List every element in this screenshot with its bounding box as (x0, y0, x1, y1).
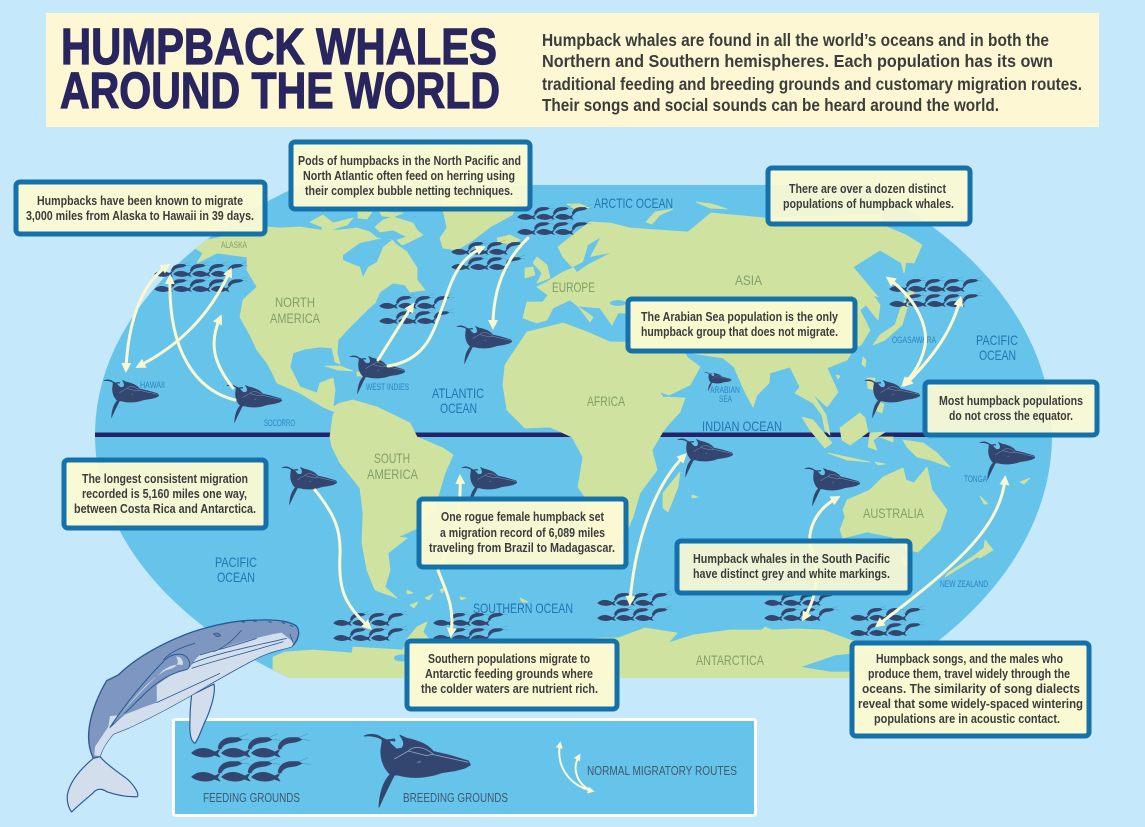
callout: songs: reveal that some widely-spaced wintering (858, 697, 1083, 711)
world map (95, 185, 1052, 678)
ocean labels: ARCTIC OCEAN (594, 195, 673, 211)
legend: breeding grounds (364, 734, 508, 807)
intro text: Their songs and social sounds can be heard around the world. (542, 95, 999, 115)
callout: songs: oceans. The similarity of song dialects (862, 682, 1080, 696)
land labels: EUROPE (552, 279, 595, 295)
callout: longest migration: The longest consistent migration (82, 472, 248, 486)
intro text: Humpback whales are found in all the world’s oceans and in both the (542, 30, 1049, 50)
population labels: WEST INDIES (366, 382, 409, 393)
callout: Arabian Sea: The Arabian Sea population is the only (641, 310, 838, 324)
geographic labels (140, 195, 1018, 668)
population labels: TONGA (964, 474, 987, 485)
title: AROUND THE WORLD (60, 62, 500, 119)
inland seas (343, 238, 626, 662)
callout: Arabian Sea: humpback group that does not migrate. (641, 325, 838, 339)
feeding ground schools (155, 205, 983, 641)
callout: dozen populations: There are over a dozen distinct (789, 182, 947, 196)
whale eye (213, 633, 221, 637)
land labels: ANTARCTICA (696, 652, 764, 668)
population labels (140, 240, 988, 590)
land labels: AMERICA (270, 310, 321, 326)
population labels: ARABIAN (710, 385, 740, 396)
land labels: AFRICA (587, 393, 625, 409)
legend: migratory routes: NORMAL MIGRATORY ROUTES (587, 763, 737, 778)
legend: feeding grounds (192, 734, 310, 805)
callout: rogue female: a migration record of 6,089 miles (440, 526, 605, 540)
callout: Alaska to Hawaii (16, 182, 265, 234)
population labels: HAWAII (140, 380, 165, 391)
callout: rogue female (419, 499, 626, 567)
ocean labels: ATLANTIC (432, 385, 484, 401)
callout: dozen populations: populations of humpback whales. (783, 197, 954, 211)
callout: longest migration: recorded is 5,160 miles one way, (82, 487, 247, 501)
callout: bubble netting: Pods of humpbacks in the North Pacific and (298, 154, 521, 168)
callout: southern populations: Southern populations migrate to (428, 652, 590, 666)
large humpback whale illustration (67, 620, 299, 812)
whale grooves (157, 630, 293, 703)
callout: rogue female: One rogue female humpback set (441, 510, 605, 524)
callout: Alaska to Hawaii: Humpbacks have been known to migrate (37, 194, 243, 208)
land labels (270, 272, 925, 668)
breeding ground whales (104, 326, 1035, 506)
population labels: SOCORRO (264, 418, 295, 429)
callout: South Pacific markings (677, 541, 910, 593)
population labels: OGASAWARA (892, 335, 936, 346)
population labels: SEA (719, 394, 732, 405)
callout: songs (852, 643, 1089, 736)
callout: bubble netting: North Atlantic often feed on herring using (303, 169, 515, 183)
callout: Alaska to Hawaii: 3,000 miles from Alaska to Hawaii in 39 days. (26, 209, 254, 223)
title (60, 18, 500, 119)
land labels: ASIA (735, 272, 763, 288)
land labels: AMERICA (367, 466, 419, 482)
ocean labels: SOUTHERN OCEAN (473, 600, 573, 616)
population labels: NEW ZEALAND (940, 579, 988, 590)
ocean (95, 185, 1052, 678)
ocean labels: INDIAN OCEAN (702, 418, 782, 434)
land labels: SOUTH (374, 450, 410, 466)
whale dark flank (113, 687, 157, 725)
land labels: AUSTRALIA (863, 505, 925, 521)
legend panel (174, 720, 756, 816)
callout: songs: populations are in acoustic contact. (874, 712, 1060, 726)
land labels: NORTH (275, 294, 315, 310)
intro text: Northern and Southern hemispheres. Each population has its own (542, 51, 1053, 71)
whale far flipper (190, 684, 214, 743)
whale tail fluke (67, 757, 138, 812)
callout: equator: do not cross the equator. (949, 409, 1073, 423)
ocean labels: PACIFIC (976, 332, 1018, 348)
legend: migratory routes (559, 744, 737, 791)
callout: equator: Most humpback populations (939, 394, 1083, 408)
population labels: ALASKA (221, 240, 247, 251)
whale belly (94, 633, 294, 757)
ocean labels: OCEAN (217, 569, 255, 585)
callout: dozen populations (768, 168, 970, 224)
ocean labels: OCEAN (440, 400, 477, 416)
ocean labels: OCEAN (979, 347, 1016, 363)
callout: southern populations (407, 641, 617, 709)
callout: Arabian Sea (628, 299, 855, 351)
whale head bumps (242, 621, 293, 627)
title: HUMPBACK WHALES (61, 18, 497, 75)
legend: breeding grounds: BREEDING GROUNDS (403, 790, 508, 805)
callout: rogue female: traveling from Brazil to Madagascar. (429, 541, 615, 555)
callout: longest migration (64, 460, 266, 528)
whale body (89, 620, 299, 758)
callout: South Pacific markings: Humpback whales in the South Pacific (693, 552, 890, 566)
callout: South Pacific markings: have distinct grey and white markings. (693, 567, 890, 581)
ocean labels: PACIFIC (215, 554, 257, 570)
header panel (46, 13, 1099, 127)
callout: songs: produce them, travel widely through the (868, 667, 1070, 681)
callout: bubble netting: their complex bubble netting techniques. (305, 184, 513, 198)
callout: songs: Humpback songs, and the males who (876, 652, 1063, 666)
migration arrows (126, 238, 1005, 634)
equator line (95, 432, 926, 437)
callout: bubble netting (291, 142, 530, 209)
intro text (542, 30, 1082, 115)
callout: equator (925, 382, 1097, 435)
intro text: traditional feeding and breeding grounds and customary migration routes. (542, 74, 1082, 94)
callout: longest migration: between Costa Rica and Antarctica. (74, 502, 256, 516)
callout: southern populations: the colder waters are nutrient rich. (421, 682, 598, 696)
continents (190, 195, 1030, 700)
whale near flipper (110, 654, 190, 727)
legend: feeding grounds: FEEDING GROUNDS (203, 790, 300, 805)
callout: southern populations: Antarctic feeding grounds where (425, 667, 593, 681)
ocean labels (215, 195, 1018, 616)
